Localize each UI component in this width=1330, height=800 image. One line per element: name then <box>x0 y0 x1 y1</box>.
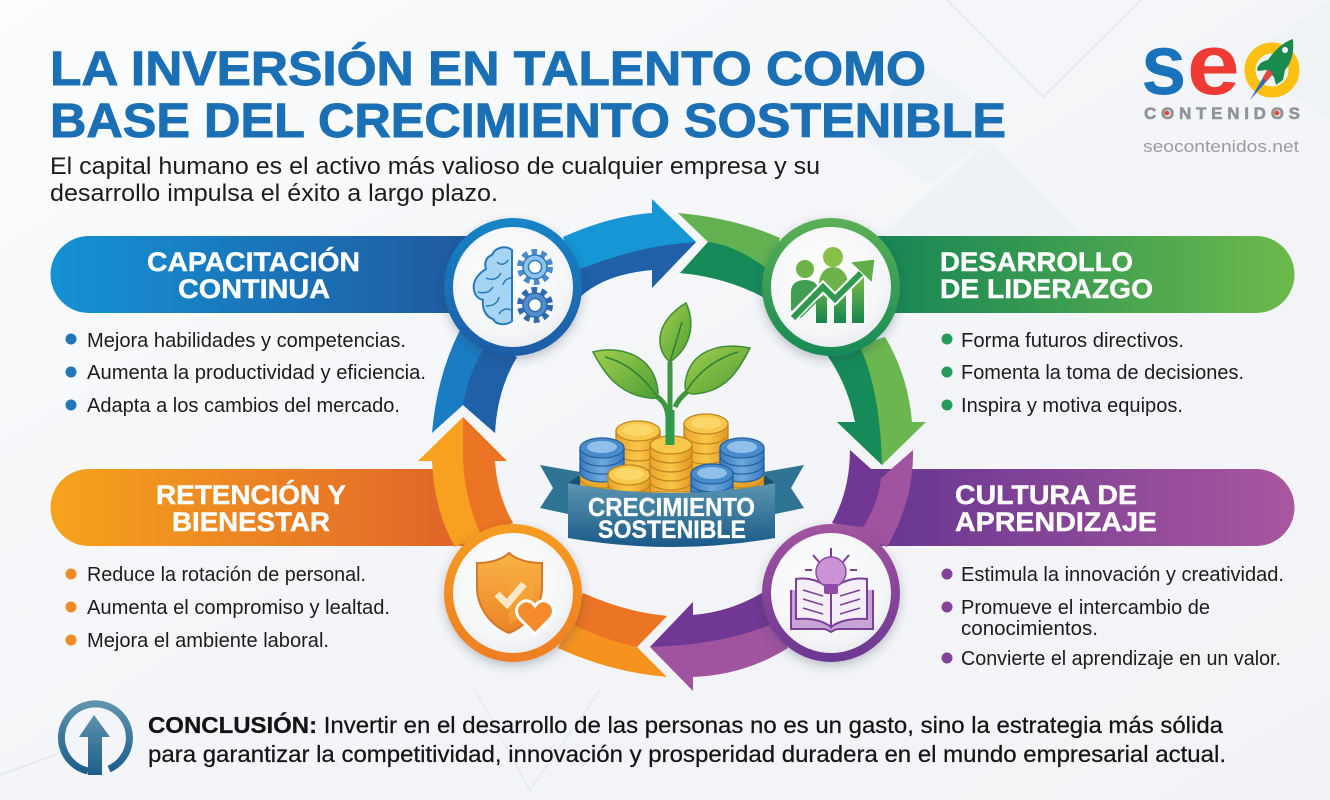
panel: capacitación continua banner: CAPACITACIÓN <box>147 247 360 277</box>
list: liderazgo <box>942 330 1244 417</box>
list: retención: Reduce la rotación de personal. <box>87 564 366 586</box>
icon: shield and heart <box>444 524 582 662</box>
list: cultura: conocimientos. <box>961 618 1098 640</box>
list: liderazgo: Fomenta la toma de decisiones. <box>961 362 1244 384</box>
list: retención: Aumenta el compromiso y lealtad. <box>87 597 390 619</box>
subtitle: El capital humano es el activo más valioso de cualquier empresa y su <box>50 153 820 180</box>
list: cultura <box>942 564 1284 670</box>
center: plant <box>593 303 750 445</box>
list: cultura: Promueve el intercambio de <box>961 597 1210 619</box>
center: crecimiento sostenible ribbon: SOSTENIBLE <box>598 516 746 544</box>
arrow: green right <box>827 337 926 465</box>
panel: retención y bienestar banner: BIENESTAR <box>172 507 330 537</box>
arrow: orange bottom <box>558 593 667 677</box>
subtitle: desarrollo impulsa el éxito a largo plazo. <box>50 180 498 207</box>
center: crecimiento sostenible ribbon <box>540 465 804 547</box>
list: capacitación: Aumenta la productividad y eficiencia. <box>87 362 426 384</box>
logo: seo contenidos: s <box>1141 16 1186 112</box>
list: cultura: Convierte el aprendizaje en un valor. <box>961 648 1281 670</box>
conclusion text: CONCLUSIÓN: Invertir en el desarrollo de las personas no es un gasto, sino la estrategia más sólida <box>148 711 1224 738</box>
list: retención: Mejora el ambiente laboral. <box>87 630 329 652</box>
panel: desarrollo de liderazgo banner <box>860 236 1294 313</box>
arrow: blue top <box>563 199 696 297</box>
subtitle <box>50 153 820 207</box>
logo: seo contenidos <box>1141 16 1300 156</box>
arrow: orange left <box>418 417 513 547</box>
logo: seo contenidos: e <box>1187 17 1240 113</box>
panel: capacitación continua banner: CONTINUA <box>178 274 330 304</box>
arrow: blue left <box>432 330 517 433</box>
panel: desarrollo de liderazgo banner: DESARROLLO <box>940 247 1133 277</box>
list: cultura: Estimula la innovación y creatividad. <box>961 564 1284 586</box>
title: LA INVERSIÓN EN TALENTO COMO <box>50 41 926 96</box>
panel: cultura de aprendizaje banner <box>860 469 1294 546</box>
logo: seo contenidos: CONTENIDOS <box>1144 104 1300 123</box>
panel: cultura de aprendizaje banner: CULTURA DE <box>955 480 1137 510</box>
list: liderazgo: Inspira y motiva equipos. <box>961 395 1183 417</box>
panel: capacitación continua banner <box>51 236 480 313</box>
logo: seo contenidos: seocontenidos.net <box>1143 137 1299 156</box>
list: capacitación <box>66 330 426 417</box>
icon: people and growth chart <box>762 218 900 356</box>
arrow: purple right <box>832 450 913 547</box>
list: capacitación: Mejora habilidades y competencias. <box>87 330 406 352</box>
center: crecimiento sostenible ribbon: CRECIMIENTO <box>588 492 755 522</box>
panel: cultura de aprendizaje banner: APRENDIZAJE <box>955 507 1157 537</box>
title <box>50 41 1006 148</box>
conclusion text: para garantizar la competitividad, innovación y prosperidad duradera en el mundo empresarial actual. <box>148 741 1226 767</box>
center: coin stacks <box>580 410 764 493</box>
panel: retención y bienestar banner: RETENCIÓN Y <box>156 480 346 510</box>
arrow: green top <box>678 213 780 297</box>
conclusion text <box>148 711 1226 767</box>
icon: brain and gears <box>444 218 582 356</box>
list: retención <box>66 564 390 652</box>
icon: up arrow in circle <box>61 704 129 775</box>
icon: book and light bulb <box>762 524 900 662</box>
panel: retención y bienestar banner <box>51 469 480 546</box>
list: capacitación: Adapta a los cambios del mercado. <box>87 395 400 417</box>
title: BASE DEL CRECIMIENTO SOSTENIBLE <box>50 95 1006 148</box>
list: liderazgo: Forma futuros directivos. <box>961 330 1184 352</box>
arrow: purple bottom <box>650 593 788 691</box>
panel: desarrollo de liderazgo banner: DE LIDERAZGO <box>940 274 1153 304</box>
